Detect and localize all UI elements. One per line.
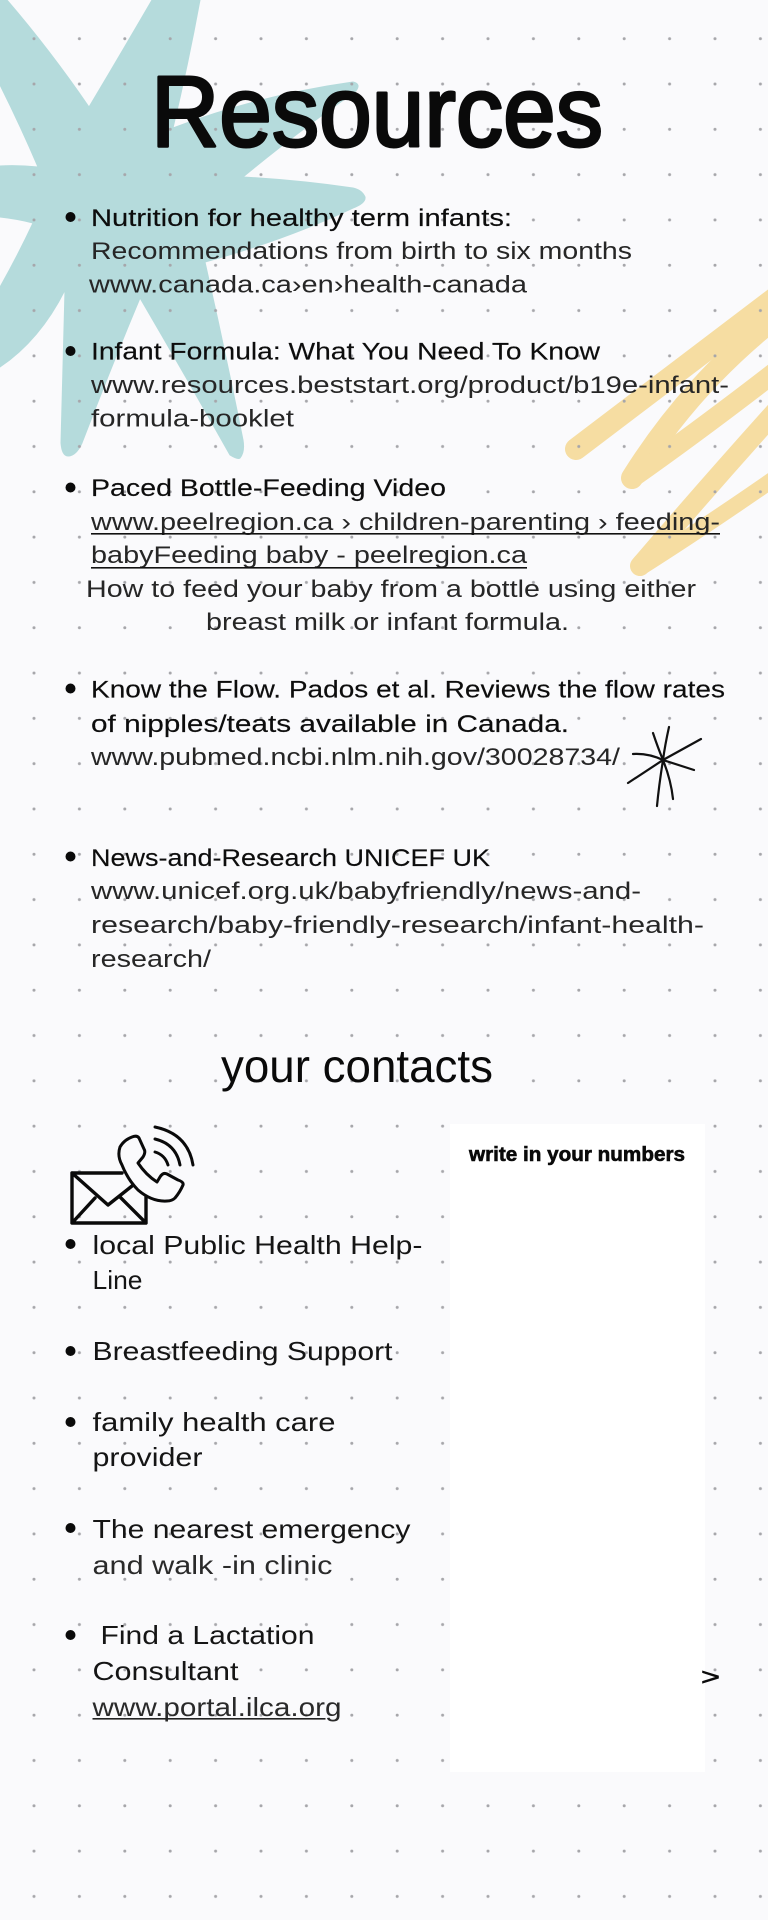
phone handset	[119, 1136, 183, 1201]
signal arcs	[155, 1127, 193, 1165]
resource: unicef news and research	[66, 845, 704, 973]
bullet	[66, 212, 76, 222]
contact: lactation consultant: Consultant	[92, 1656, 239, 1686]
decoration: teal star	[0, 0, 365, 459]
panel heading: write in your numbers	[468, 1144, 685, 1166]
description: Recommendations from birth to six months	[91, 238, 632, 265]
heading continued: of nipples/teats available in Canada.	[91, 711, 569, 738]
url: www.unicef.org.uk/babyfriendly/news-and-	[90, 878, 641, 905]
heading: your contacts: your contacts	[221, 1040, 493, 1092]
bullet	[66, 346, 76, 356]
linked url continued: babyFeeding baby - peelregion.ca	[91, 542, 528, 569]
contact: breastfeeding support: Breastfeeding Support	[92, 1336, 393, 1366]
contact: lactation consultant	[66, 1620, 342, 1722]
contact: nearest emergency: The nearest emergency	[92, 1514, 410, 1544]
url end: research/	[91, 946, 211, 973]
heading line: Know the Flow. Pados et al. Reviews the flow rates	[91, 676, 725, 704]
resource: paced bottle feeding	[66, 475, 720, 636]
resource: nutrition	[66, 205, 632, 298]
url: www.pubmed.ncbi.nlm.nih.gov/30028734/	[90, 744, 620, 771]
url continued: research/baby-friendly-research/infant-health-	[91, 912, 704, 939]
description: How to feed your baby from a bottle using either	[86, 576, 696, 603]
panel: write in your numbers	[450, 1124, 705, 1772]
contact: public health line: Line	[92, 1265, 142, 1295]
contact: lactation consultant: www.portal.ilca.org	[91, 1692, 342, 1722]
linked url: www.peelregion.ca › children-parenting › feeding-	[90, 509, 720, 536]
icon: envelope and phone	[72, 1127, 193, 1223]
contact: lactation consultant: Find a Lactation	[100, 1620, 314, 1650]
resource: know the flow	[66, 676, 725, 771]
bullet	[66, 482, 76, 492]
contact: family health care provider	[66, 1407, 336, 1472]
contact: public health line: local Public Health Help-	[92, 1230, 423, 1260]
arrow mark: >	[701, 1664, 720, 1691]
heading line: News-and-Research UNICEF UK	[91, 845, 490, 872]
heading line: Nutrition for healthy term infants:	[91, 205, 512, 232]
url: www.resources.beststart.org/product/b19e-infant-	[90, 372, 729, 399]
resource: infant formula	[66, 338, 729, 432]
heading line: Paced Bottle-Feeding Video	[91, 475, 446, 502]
contact list	[66, 1230, 423, 1722]
contact: nearest emergency	[66, 1514, 410, 1580]
description continued: breast milk or infant formula.	[206, 609, 569, 636]
contact: public health line	[66, 1230, 423, 1295]
contact: family health care provider: provider	[92, 1442, 203, 1472]
url: www.canada.ca›en›health-canada	[88, 272, 528, 298]
bullet	[66, 684, 76, 694]
contact: family health care provider: family health care	[92, 1407, 336, 1437]
heading line: Infant Formula: What You Need To Know	[91, 338, 601, 366]
bullet	[66, 852, 76, 862]
icon: hand-drawn asterisk	[628, 727, 701, 806]
contact: nearest emergency: and walk -in clinic	[92, 1550, 332, 1580]
decoration: yellow scribble	[576, 298, 768, 568]
url continued: formula-booklet	[91, 406, 294, 432]
title: Resources	[151, 56, 603, 167]
envelope	[72, 1173, 146, 1223]
